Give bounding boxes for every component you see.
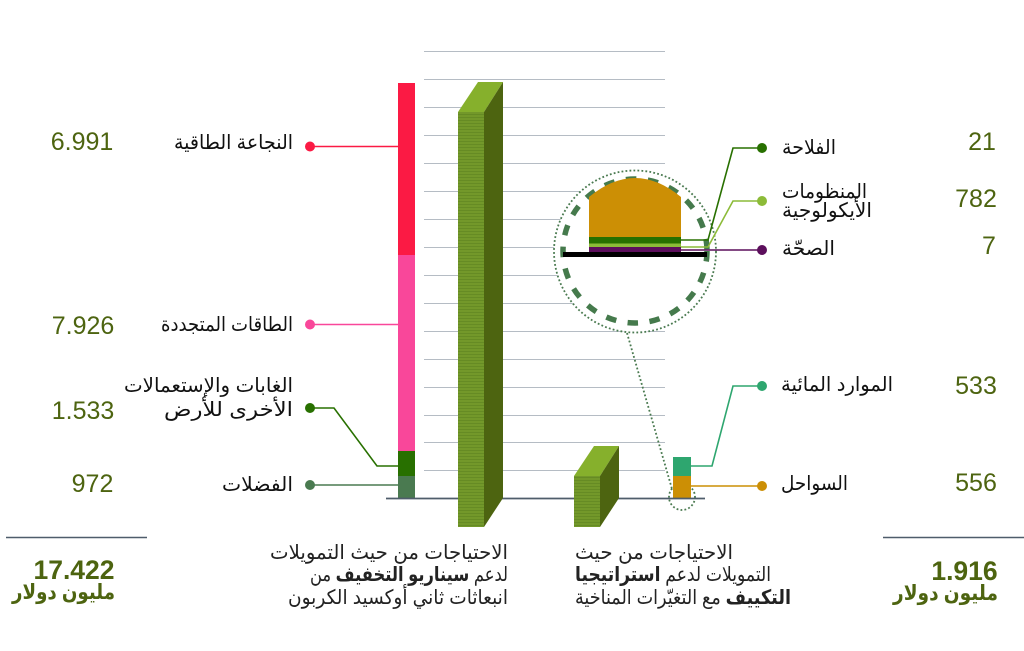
bar chart: adaptation stacked bar [673, 457, 691, 498]
leader: energy efficiency [305, 142, 398, 152]
value: 21: 21 [968, 128, 996, 156]
label: waste: الفضلات [222, 474, 293, 496]
value: 7: 7 [982, 232, 996, 260]
leader: coasts [691, 481, 767, 491]
bar chart: mitigation stacked bar [398, 83, 415, 498]
total: mitigation: مليون دولار [11, 581, 115, 604]
leader: waste [305, 480, 398, 490]
caption: mitigation: لدعم سيناريو التخفيف من [310, 564, 508, 586]
caption: mitigation [270, 542, 508, 610]
caption: mitigation: انبعاثات ثاني أوكسيد الكربون [288, 584, 508, 610]
zoom connector [627, 333, 695, 510]
leader: health [681, 245, 767, 255]
3D bar: adaptation needs [574, 446, 619, 527]
value: 972: 972 [72, 470, 113, 498]
label: forests and land use: الغابات والإستعمالات [124, 375, 293, 397]
label: coasts: السواحل [781, 473, 848, 495]
label: forests and land use [124, 375, 293, 421]
caption: adaptation: التكييف مع التغيّرات المناخية [575, 587, 791, 609]
value: 1.533: 1.533 [52, 397, 114, 425]
label: ecosystems: الأيكولوجية [782, 198, 872, 222]
caption: adaptation [575, 542, 791, 609]
3D bar: mitigation needs [458, 82, 503, 527]
value: 556: 556 [955, 469, 997, 497]
caption: mitigation: الاحتياجات من حيث التمويلات [270, 542, 508, 564]
leader: forests and land use [305, 403, 398, 466]
zoom circle [554, 170, 716, 332]
leader: water resources [691, 381, 767, 466]
leader: agriculture [681, 143, 767, 240]
total: adaptation: مليون دولار [892, 582, 998, 605]
baseline [386, 498, 705, 500]
label: renewable energy: الطاقات المتجددة [161, 314, 293, 336]
total divider right [883, 536, 1024, 538]
total: mitigation: 17.422 [33, 555, 115, 585]
label: energy efficiency: النجاعة الطاقية [174, 132, 293, 154]
value: 533: 533 [955, 372, 997, 400]
total divider left [6, 536, 147, 538]
total: mitigation [11, 555, 115, 604]
value: 6.991: 6.991 [51, 128, 113, 156]
label: agriculture: الفلاحة [782, 137, 836, 159]
value: 782: 782 [955, 185, 997, 213]
label: health: الصحّة [782, 238, 835, 260]
total: adaptation [892, 556, 998, 605]
total: adaptation: 1.916 [931, 556, 998, 586]
leader: renewable energy [305, 320, 398, 330]
leader: ecosystems [681, 196, 767, 247]
value: 7.926: 7.926 [52, 312, 114, 340]
caption: adaptation: التمويلات لدعم استراتيجيا [575, 564, 771, 586]
label: ecosystems: المنظومات [782, 181, 867, 203]
label: water resources: الموارد المائية [781, 374, 893, 396]
caption: adaptation: الاحتياجات من حيث [575, 542, 733, 564]
label: forests and land use: الأخرى للأرض [164, 397, 293, 421]
label: ecosystems [782, 181, 872, 222]
